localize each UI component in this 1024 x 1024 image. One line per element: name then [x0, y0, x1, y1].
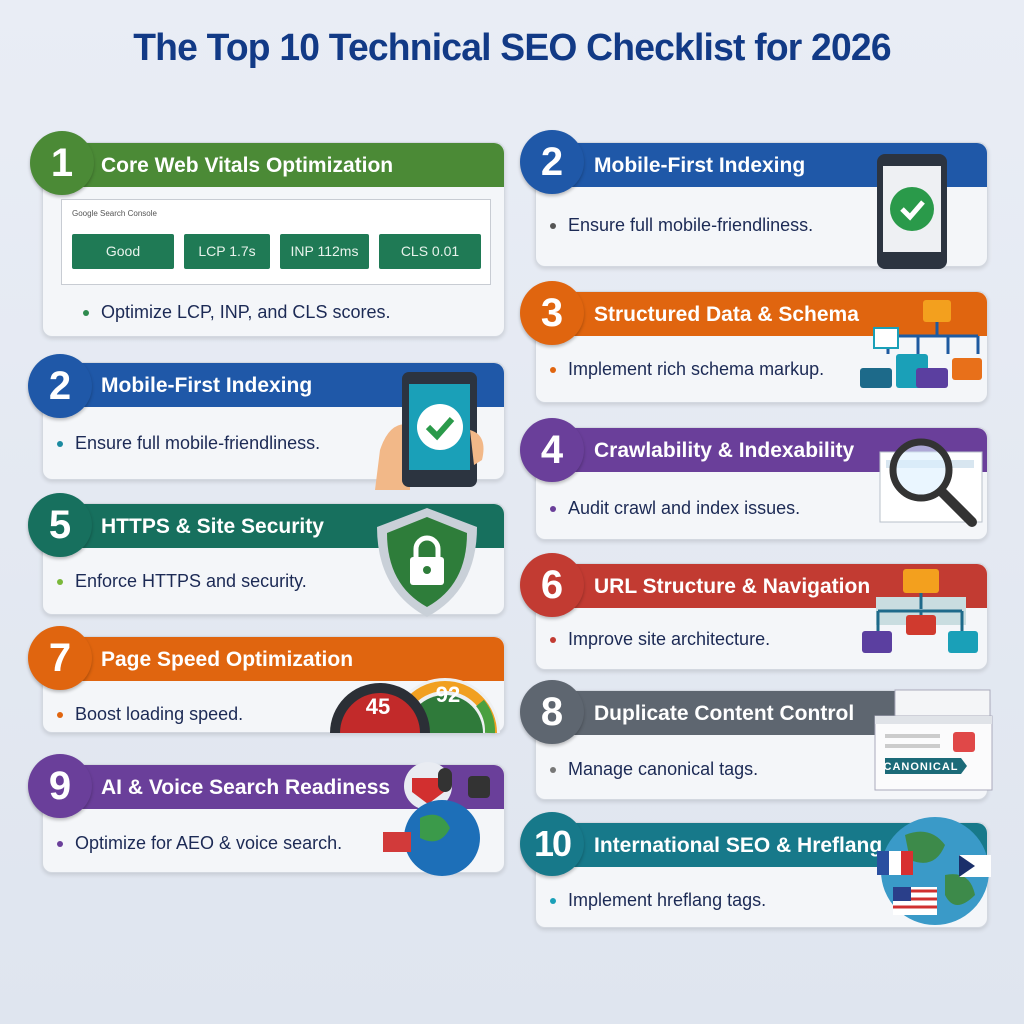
icon: site tree — [862, 569, 978, 653]
panel: 5 https — [42, 503, 505, 615]
icon: speed gauges: 45 — [366, 694, 390, 719]
badge 2 left: 2 — [49, 364, 71, 408]
icon: schema tree — [860, 300, 982, 388]
search console mock: LCP 1.7s — [198, 243, 256, 259]
icon: speed gauges — [330, 678, 500, 734]
panel: 5 https: HTTPS & Site Security — [101, 515, 324, 538]
panel: 9 ai voice: AI & Voice Search Readiness — [101, 776, 390, 799]
panel: 1 core web vitals — [42, 142, 505, 337]
panel: 2 mobile-first right: Mobile-First Indexing — [594, 154, 805, 177]
badge 2 right: 2 — [541, 140, 563, 184]
badge 8: 8 — [541, 690, 563, 734]
panel: 3 structured data — [535, 291, 988, 403]
panel: 6 url structure: Improve site architecture. — [568, 629, 770, 649]
panel: 2 mobile-first right — [535, 142, 988, 267]
badge 10: 10 — [534, 823, 570, 864]
panel: 10 international — [535, 822, 988, 928]
panel: 3 structured data: Implement rich schema markup. — [568, 359, 824, 379]
panel: 6 url structure: URL Structure & Navigation — [594, 575, 870, 598]
title: The Top 10 Technical SEO Checklist for 2026 — [133, 27, 891, 69]
badge 6: 6 — [541, 563, 563, 607]
icon: globe with flags — [877, 817, 991, 925]
icon: shield lock — [377, 508, 477, 616]
icon: globe with robot and mic — [383, 762, 490, 876]
panel: 2 mobile-first left — [42, 362, 505, 480]
badge 2 right — [520, 130, 584, 194]
icon: phone with hand — [375, 372, 484, 490]
panel: 4 crawlability — [535, 427, 988, 540]
panel: 7 page speed: Boost loading speed. — [75, 704, 243, 724]
icon: canonical windows — [874, 690, 992, 790]
badge 7 — [28, 626, 92, 690]
panel: 6 url structure — [535, 563, 988, 670]
panel: 3 structured data: Structured Data & Schema — [594, 303, 859, 326]
header 1: Core Web Vitals Optimization — [101, 154, 393, 177]
panel: 10 international: Implement hreflang tags. — [568, 890, 766, 910]
panel: 8 duplicate content: Manage canonical tags. — [568, 759, 758, 779]
panel: 8 duplicate content — [535, 690, 988, 800]
panel: 2 mobile-first left: Mobile-First Indexing — [101, 374, 312, 397]
panel: 4 crawlability: Crawlability & Indexability — [594, 439, 854, 462]
badge 4 — [520, 418, 584, 482]
search console mock: Google Search Console — [72, 209, 157, 218]
search console mock: CLS 0.01 — [401, 243, 459, 259]
badge 5: 5 — [49, 503, 71, 547]
icon: canonical windows: CANONICAL — [884, 761, 958, 773]
panel: 9 ai voice: Optimize for AEO & voice search. — [75, 833, 342, 853]
search console mock: INP 112ms — [291, 243, 358, 259]
badge 6 — [520, 553, 584, 617]
bullet 1: Optimize LCP, INP, and CLS scores. — [101, 302, 390, 322]
badge 3: 3 — [541, 291, 563, 335]
badge 5 — [28, 493, 92, 557]
badge 2 left — [28, 354, 92, 418]
badge 3 — [520, 281, 584, 345]
search console mock — [61, 199, 491, 285]
panel: 9 ai voice — [42, 764, 505, 873]
panel: 7 page speed — [42, 636, 505, 733]
search console mock: Good — [106, 243, 140, 259]
badge 10 — [520, 812, 584, 876]
panel: 5 https: Enforce HTTPS and security. — [75, 571, 307, 591]
panel: 2 mobile-first right: Ensure full mobile-friendliness. — [568, 215, 813, 235]
badge 1: 1 — [51, 141, 73, 185]
panel: 10 international: International SEO & Hreflang — [594, 834, 882, 857]
badge 9 — [28, 754, 92, 818]
badge 7: 7 — [49, 636, 71, 680]
badge 9: 9 — [49, 764, 71, 808]
icon: speed gauges: 92 — [436, 682, 460, 707]
icon: phone — [877, 154, 947, 269]
badge 1 — [30, 131, 94, 195]
badge 4: 4 — [541, 428, 563, 472]
panel: 2 mobile-first left: Ensure full mobile-friendliness. — [75, 433, 320, 453]
panel: 8 duplicate content: Duplicate Content Control — [594, 702, 854, 725]
panel: 4 crawlability: Audit crawl and index issues. — [568, 498, 800, 518]
icon: magnifier on page — [880, 438, 982, 527]
badge 8 — [520, 680, 584, 744]
header 1 — [43, 143, 504, 187]
panel: 7 page speed: Page Speed Optimization — [101, 648, 353, 671]
